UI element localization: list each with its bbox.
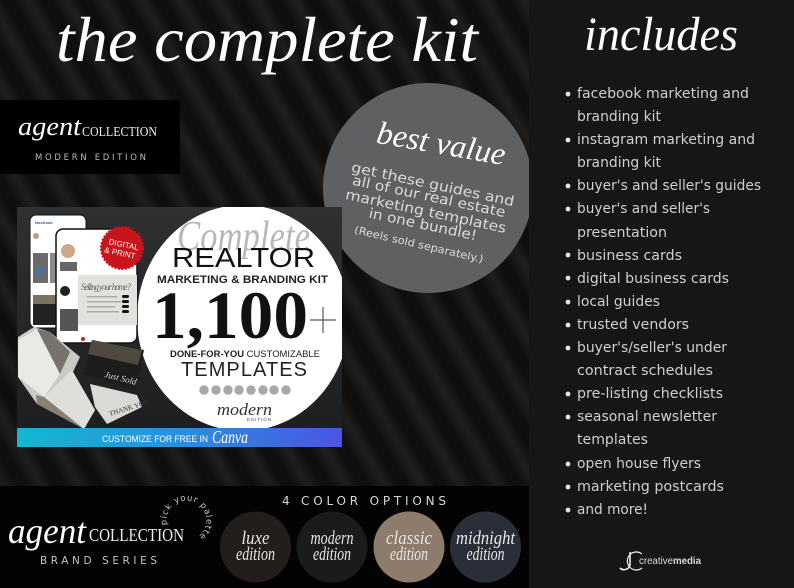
headline text: 1,100: [152, 277, 308, 353]
product image: realtor kit: [17, 205, 349, 447]
list: kit contents: marketing postcards: [577, 479, 724, 495]
curved label: pick your palette: pick your palette: [160, 496, 213, 538]
canva banner: [17, 427, 342, 447]
title: the complete kit: [56, 4, 480, 75]
agent collection brand series logo: COLLECTION: [89, 525, 184, 545]
list: kit contents: seasonal newsletter: [577, 409, 717, 425]
swatch: classic edition: [374, 512, 444, 582]
phone: instagram mockup: Selling your home?: [81, 282, 132, 292]
modern edition mark: EDITION: [247, 417, 271, 422]
list: kit contents: pre-listing checklists: [577, 386, 723, 402]
swatch: modern edition: modern: [310, 528, 354, 549]
agent collection brand series logo: [8, 511, 184, 567]
headline text: Complete: [177, 214, 310, 260]
badge: digital and print: [101, 227, 143, 269]
best value heading: best value: [374, 114, 508, 172]
panel: agent collection modern edition label: COLLECTION: [82, 124, 157, 139]
plus sign: [310, 307, 336, 333]
canva banner: Canva: [212, 427, 248, 447]
list: kit contents: trusted vendors: [577, 317, 689, 333]
list: kit contents: buyer's/seller's under: [577, 340, 727, 356]
swatch: classic edition: classic: [386, 528, 432, 549]
canva banner: CUSTOMIZE FOR FREE IN: [102, 434, 208, 445]
headline text: [152, 214, 328, 381]
thank you card mockup: THANK YOU: [108, 398, 150, 418]
phone: instagram mockup: [56, 229, 137, 343]
best value description: (Reels sold separately.): [353, 224, 484, 266]
swatch: luxe edition: edition: [236, 544, 275, 565]
swatch: modern edition: edition: [313, 544, 351, 565]
list: kit contents: buyer's and seller's: [577, 201, 710, 217]
badge: digital and print: & PRINT: [104, 245, 136, 261]
logo: jc creativemedia: creativemedia: [639, 556, 701, 567]
swatch: classic edition: edition: [390, 544, 428, 565]
list: kit contents: buyer's and seller's guides: [577, 178, 761, 194]
panel: agent collection modern edition label: agent: [18, 112, 82, 141]
best value description: [344, 160, 516, 266]
list: kit contents: and more!: [577, 502, 648, 518]
white circle panel: [137, 205, 349, 431]
headline text: DONE-FOR-YOU CUSTOMIZABLE: [170, 349, 320, 359]
list: kit contents: local guides: [577, 294, 660, 310]
list: kit contents: business cards: [577, 248, 682, 264]
phone: facebook mockup: facebook: [35, 220, 53, 225]
phone: facebook mockup: [30, 215, 86, 328]
sidebar heading: includes: includes: [584, 8, 738, 61]
swatch: luxe edition: [220, 512, 291, 582]
badge: digital and print: DIGITAL: [108, 237, 140, 252]
list: kit contents: presentation: [577, 225, 667, 241]
best value description: marketing templates: [344, 187, 508, 237]
list: kit contents: templates: [577, 432, 648, 448]
swatch: midnight edition: [450, 512, 521, 582]
list: kit contents: instagram marketing and: [577, 132, 755, 148]
list: kit contents: [566, 86, 761, 518]
panel: includes sidebar background: [529, 0, 794, 588]
list: kit contents: branding kit: [577, 109, 661, 125]
swatch: midnight edition: midnight: [456, 528, 516, 549]
heading: 4 color options: 4 COLOR OPTIONS: [282, 494, 446, 508]
brochure mockup: [18, 327, 95, 429]
best value description: all of our real estate: [351, 173, 507, 221]
list: kit contents: digital business cards: [577, 271, 729, 287]
modern edition mark: modern: [217, 400, 272, 419]
agent collection brand series logo: BRAND SERIES: [40, 555, 157, 567]
social icons row: [199, 385, 291, 395]
best value description: in one bundle!: [367, 206, 478, 244]
swatch: midnight edition: edition: [466, 544, 504, 565]
list: kit contents: branding kit: [577, 155, 661, 171]
logo: jc creativemedia: [620, 552, 701, 570]
badge: best value circle: [323, 83, 533, 293]
dark card mockup: Just Sold: [104, 369, 138, 387]
list: kit contents: open house flyers: [577, 456, 701, 472]
best value description: get these guides and: [350, 160, 516, 210]
thank you card mockup: [90, 384, 150, 424]
swatch: luxe edition: luxe: [242, 528, 270, 549]
headline text: REALTOR: [172, 242, 315, 273]
striped dark background: [0, 0, 529, 588]
panel: agent collection modern edition label: [0, 100, 180, 174]
agent collection brand series logo: agent: [8, 511, 87, 551]
swatch: modern edition: [296, 512, 368, 582]
headline text: TEMPLATES: [181, 359, 307, 381]
list: kit contents: facebook marketing and: [577, 86, 749, 102]
panel: agent collection modern edition label: MODERN EDITION: [35, 153, 146, 163]
panel: brand series footer: [0, 486, 529, 588]
headline text: MARKETING & BRANDING KIT: [157, 274, 328, 286]
list: kit contents: contract schedules: [577, 363, 713, 379]
dark card mockup: [84, 340, 144, 390]
